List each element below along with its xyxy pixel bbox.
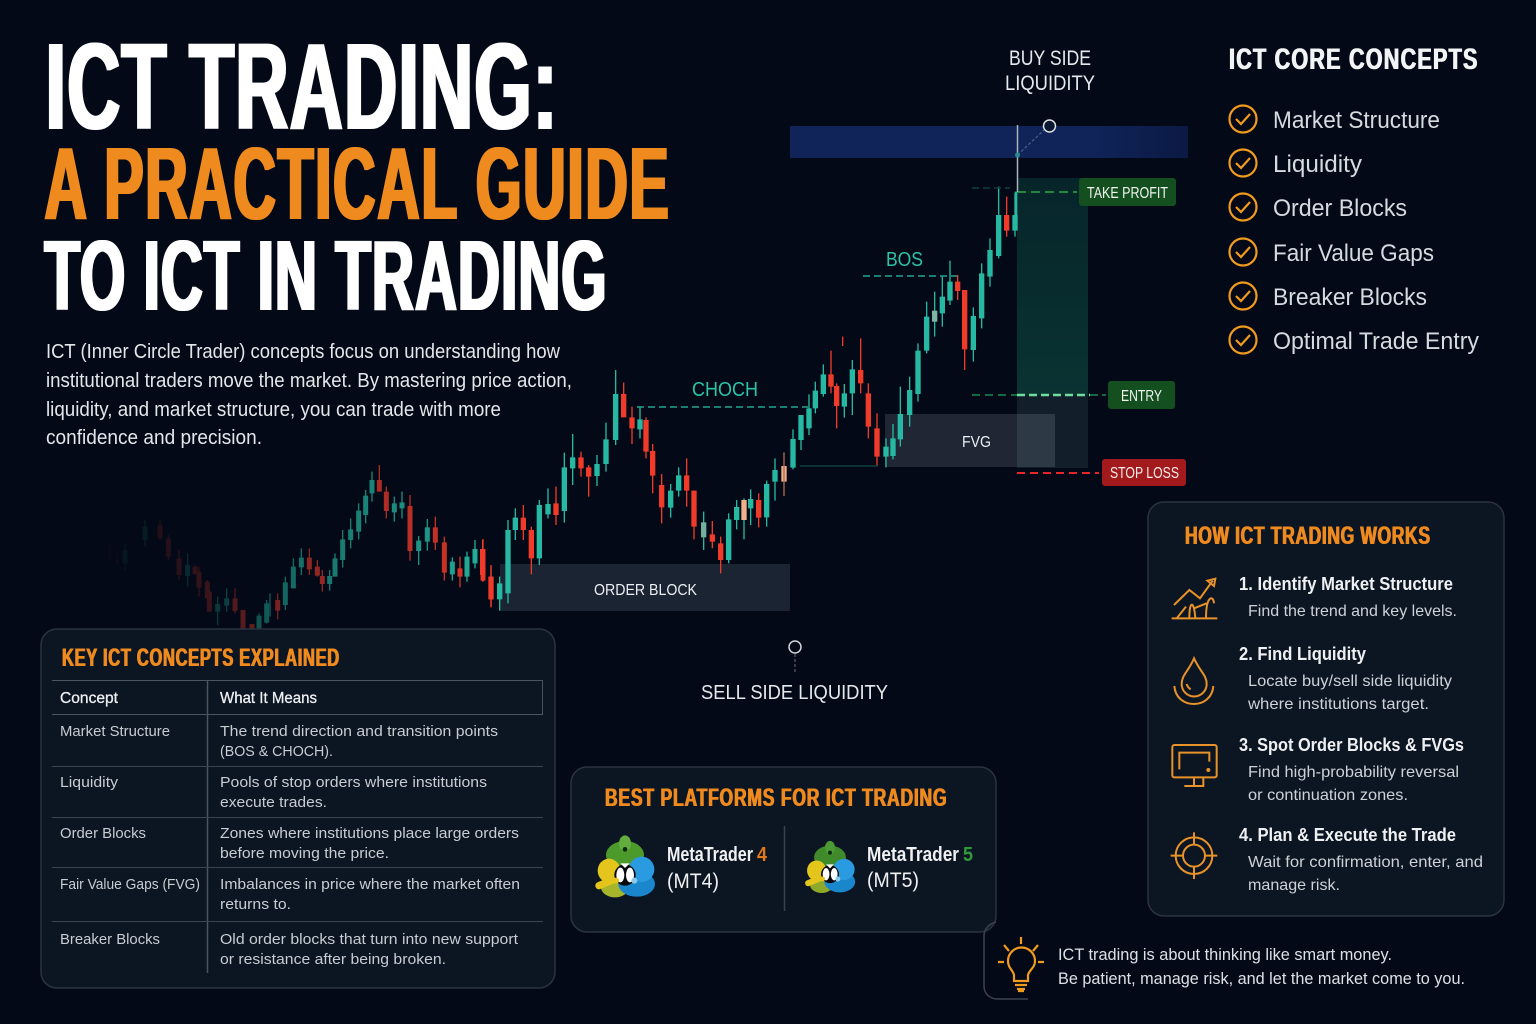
intro paragraph: institutional traders move the market. By mastering price action, <box>46 370 572 392</box>
candlestick chart <box>100 187 1016 630</box>
row: breaker blocks: Breaker Blocks <box>60 931 160 948</box>
row: order blocks: before moving the price. <box>220 845 389 862</box>
row: liquidity <box>60 774 487 811</box>
step 1 text <box>1239 574 1457 620</box>
checklist labels: Market Structure <box>1273 107 1440 134</box>
dashed level lines <box>637 188 1106 473</box>
row: market structure <box>60 723 498 760</box>
step 3 text: 3. Spot Order Blocks & FVGs <box>1239 735 1464 755</box>
checklist labels: Optimal Trade Entry <box>1273 328 1479 355</box>
title: TO ICT IN TRADING <box>44 221 607 332</box>
buy side liquidity label: LIQUIDITY <box>1005 72 1095 95</box>
icon: target <box>1171 832 1217 879</box>
buy side marker <box>1015 120 1056 192</box>
heading: key concepts: KEY ICT CONCEPTS EXPLAINED <box>62 645 339 672</box>
take profit badge: TAKE PROFIT <box>1087 185 1168 202</box>
step 4 text: 4. Plan & Execute the Trade <box>1239 825 1456 845</box>
BOS label: BOS <box>886 249 923 271</box>
step 3 text: Find high-probability reversal <box>1248 764 1459 781</box>
heading: how it works: HOW ICT TRADING WORKS <box>1185 521 1430 550</box>
panel: key ICT concepts table <box>41 629 555 988</box>
step 2 text: 2. Find Liquidity <box>1239 644 1366 664</box>
step 2 text: where institutions target. <box>1247 696 1429 713</box>
step 2 text <box>1239 644 1452 713</box>
table header: What It Means <box>220 690 317 707</box>
tip text <box>1058 946 1465 988</box>
table grid <box>52 680 543 973</box>
step 1 text: Find the trend and key levels. <box>1248 603 1457 620</box>
icon: MetaTrader 4 logo <box>598 835 655 897</box>
icon: liquidity drop <box>1174 658 1213 704</box>
row: fair value gaps: Fair Value Gaps (FVG) <box>60 876 200 893</box>
step 4 text <box>1239 825 1483 894</box>
stop loss badge <box>1102 459 1186 486</box>
entry badge: ENTRY <box>1121 388 1162 405</box>
buy side liquidity label <box>1005 47 1095 95</box>
fade overlay <box>100 450 500 630</box>
callout: smart money tip <box>984 922 1465 999</box>
checklist labels: Fair Value Gaps <box>1273 240 1434 267</box>
step 3 text <box>1239 735 1464 804</box>
step 4 text: manage risk. <box>1248 877 1340 894</box>
title <box>44 19 669 332</box>
label: MetaTrader 4: (MT4) <box>667 870 719 893</box>
intro paragraph: ICT (Inner Circle Trader) concepts focus on understanding how <box>46 341 561 363</box>
table header <box>60 690 317 707</box>
label: MetaTrader 4: 4 <box>757 844 768 866</box>
label: MetaTrader 4: MetaTrader <box>667 844 753 866</box>
label: MetaTrader 4 <box>667 844 768 893</box>
row: liquidity: execute trades. <box>220 794 327 811</box>
panel: ICT core concepts <box>1229 41 1479 355</box>
row: order blocks: Order Blocks <box>60 825 146 842</box>
label: MetaTrader 5: (MT5) <box>867 869 919 892</box>
intro paragraph <box>46 341 572 449</box>
sell side liquidity marker <box>701 641 888 704</box>
buy side liquidity label: BUY SIDE <box>1009 47 1091 70</box>
FVG zone <box>885 414 1055 467</box>
row: fair value gaps: Imbalances in price where the market often <box>220 876 520 893</box>
checklist labels: Liquidity <box>1273 151 1362 178</box>
row: market structure: (BOS & CHOCH). <box>220 743 333 760</box>
step 3 text: or continuation zones. <box>1248 787 1408 804</box>
FVG zone: FVG <box>962 434 991 451</box>
intro paragraph: confidence and precision. <box>46 427 262 449</box>
sell side liquidity marker: SELL SIDE LIQUIDITY <box>701 682 888 704</box>
label: MetaTrader 5 <box>867 844 973 892</box>
step 1 text: 1. Identify Market Structure <box>1239 574 1453 594</box>
heading: platforms: BEST PLATFORMS FOR ICT TRADING <box>605 783 947 812</box>
checklist labels <box>1273 107 1479 355</box>
row: fair value gaps <box>60 876 520 913</box>
label: MetaTrader 5: MetaTrader <box>867 844 959 866</box>
intro paragraph: liquidity, and market structure, you can trade with more <box>46 399 501 421</box>
row: order blocks: Zones where institutions place large orders <box>220 825 519 842</box>
row: liquidity: Liquidity <box>60 774 119 791</box>
checklist icons <box>1230 106 1256 354</box>
step 2 text: Locate buy/sell side liquidity <box>1248 673 1452 690</box>
row: order blocks <box>60 825 519 862</box>
checklist labels: Breaker Blocks <box>1273 284 1427 311</box>
row: breaker blocks: or resistance after being broken. <box>220 951 446 968</box>
take profit badge <box>1079 178 1176 206</box>
table header: Concept <box>60 690 119 707</box>
tip text: ICT trading is about thinking like smart money. <box>1058 946 1392 964</box>
CHOCH label: CHOCH <box>692 379 758 401</box>
title: A PRACTICAL GUIDE <box>44 126 669 241</box>
stop loss badge: STOP LOSS <box>1110 465 1179 482</box>
row: breaker blocks <box>60 931 519 968</box>
candles: right section <box>886 187 1016 467</box>
label: MetaTrader 5: 5 <box>963 844 973 866</box>
row: fair value gaps: returns to. <box>220 896 291 913</box>
candles: middle section <box>483 337 877 611</box>
candles: left faded section <box>110 465 491 628</box>
title: ICT TRADING: <box>46 19 557 156</box>
row: market structure: The trend direction and transition points <box>220 723 498 740</box>
icon: light bulb <box>998 937 1044 991</box>
row: liquidity: Pools of stop orders where institutions <box>220 774 487 791</box>
icon: MetaTrader 5 logo <box>807 841 855 893</box>
panel: how ICT trading works <box>1148 502 1504 916</box>
entry badge <box>1108 381 1175 409</box>
icon: market structure chart <box>1172 579 1217 618</box>
order block zone <box>500 564 790 611</box>
icon: monitor <box>1172 745 1217 786</box>
row: market structure: Market Structure <box>60 723 170 740</box>
order block zone: ORDER BLOCK <box>594 582 697 599</box>
heading: core concepts: ICT CORE CONCEPTS <box>1229 41 1477 76</box>
chart zone: risk reward box <box>1017 178 1088 468</box>
chart zone: liquidity band <box>790 126 1188 158</box>
step 4 text: Wait for confirmation, enter, and <box>1248 854 1483 871</box>
row: breaker blocks: Old order blocks that turn into new support <box>220 931 519 948</box>
tip text: Be patient, manage risk, and let the market come to you. <box>1058 970 1465 988</box>
panel: best platforms <box>571 767 996 932</box>
checklist labels: Order Blocks <box>1273 195 1407 222</box>
